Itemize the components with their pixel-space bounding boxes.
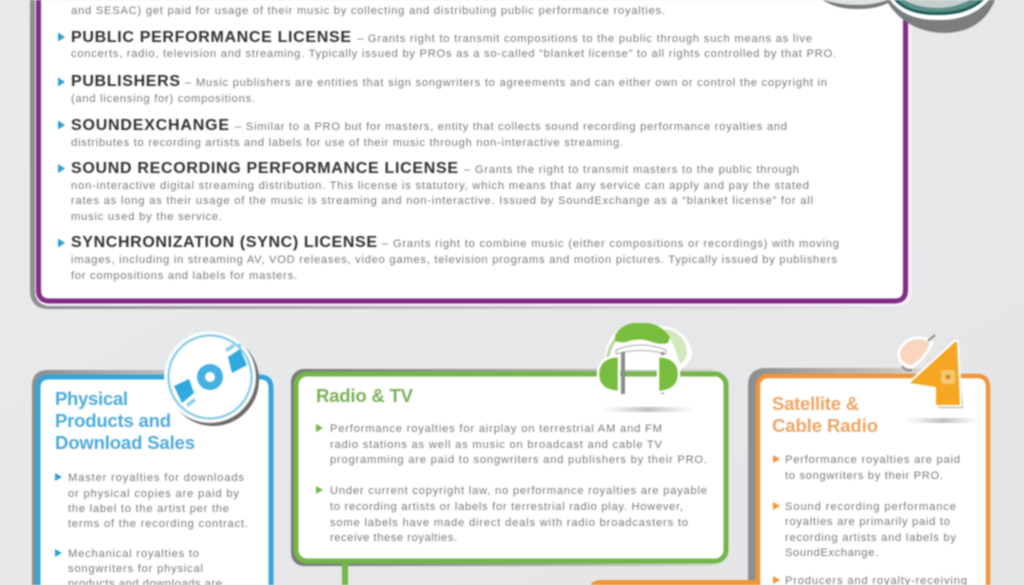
- bullet: master royalties: [55, 472, 248, 530]
- term: sound recording performance license: rates as long as their usage of the music is streaming and non-interactive. Issued by SoundExchange as a “blanket license” for all: [71, 195, 813, 207]
- icon: disc corner art: [823, 0, 995, 33]
- bullet: performance royalties: [773, 454, 960, 482]
- term: soundexchange: [58, 117, 787, 149]
- bullet: master royalties: terms of the recording contract.: [68, 518, 248, 530]
- term: public performance license: [58, 29, 836, 60]
- heading: physical products: Download Sales: [55, 432, 195, 453]
- term: soundexchange: – Similar to a PRO but for masters, entity that collects sound recording performance royalties and: [235, 121, 787, 133]
- heading: physical products: Products and: [55, 410, 171, 431]
- bullet: mechanical royalties: [55, 548, 222, 585]
- bullet: performance royalties for airplay: programming are paid to songwriters and publishers by their PRO.: [330, 454, 707, 466]
- bullet: performance royalties for airplay: radio stations as well as music on broadcast and cable TV: [330, 439, 663, 451]
- icon: satellite dish: [899, 335, 963, 408]
- heading: satellite and cable radio: Cable Radio: [772, 415, 878, 436]
- bullet: sound recording performance royalties: recording artists and labels by: [785, 532, 956, 544]
- term: sound recording performance license: music used by the service.: [71, 211, 222, 223]
- term: synchronization license: – Grants right to combine music (either compositions or recordings) with moving: [382, 238, 839, 250]
- term: publishers: (and licensing for) compositions.: [71, 93, 255, 105]
- term: sound recording performance license: non-interactive digital streaming distribution. This license is statutory, which means that any service can apply and pay the stated: [71, 180, 809, 192]
- bullet: performance royalties: Performance royalties are paid: [785, 454, 960, 466]
- term: publishers: PUBLISHERS: [71, 73, 180, 90]
- heading: radio and tv: Radio & TV: [316, 385, 414, 406]
- bullet: no performance royalties: [316, 485, 707, 544]
- panel: satellite and cable radio: [590, 335, 988, 585]
- term: synchronization license: images, including in streaming AV, VOD releases, video games, television programs and motion pictures. Typically issued by publishers: [71, 254, 837, 266]
- bullet: performance royalties for airplay: Performance royalties for airplay on terrestrial AM and FM: [330, 423, 662, 435]
- term: publishers: – Music publishers are entities that sign songwriters to agreements and can either own or control the copyright in: [185, 77, 827, 89]
- bullet: no performance royalties: Under current copyright law, no performance royalties are payable: [330, 485, 707, 497]
- bullet: performance royalties: to songwriters by their PRO.: [785, 470, 943, 482]
- bullet: no performance royalties: some labels have made direct deals with radio broadcasters to: [330, 517, 688, 529]
- bullet: mechanical royalties: songwriters for physical: [68, 563, 203, 575]
- bullet: master royalties: the label to the artist per the: [68, 503, 229, 515]
- term: synchronization license: SYNCHRONIZATION (SYNC) LICENSE: [71, 234, 377, 251]
- bullet: mechanical royalties: Mechanical royalties to: [68, 548, 199, 560]
- term: sound recording performance license: [58, 160, 813, 223]
- term: and SESAC continuation: and SESAC) get paid for usage of their music by collecting and distributing public performance royalties.: [71, 5, 665, 17]
- panel: glossary definitions: [30, 0, 995, 309]
- bullet: no performance royalties: to recording artists or labels for terrestrial radio play. However,: [330, 501, 683, 513]
- term: soundexchange: SOUNDEXCHANGE: [71, 117, 229, 134]
- panel: radio and tv: [291, 323, 726, 585]
- heading: satellite and cable radio: [772, 393, 878, 436]
- bullet: master royalties: Master royalties for downloads: [68, 472, 244, 484]
- term: soundexchange: distributes to recording artists and labels for use of their music through non-interactive streaming.: [71, 137, 623, 149]
- term: public performance license: – Grants right to transmit compositions to the public through such means as live: [357, 33, 812, 45]
- term: synchronization license: for compositions and labels for masters.: [71, 270, 297, 282]
- term: publishers: [58, 73, 827, 105]
- term: sound recording performance license: SOUND RECORDING PERFORMANCE LICENSE: [71, 160, 458, 177]
- icon: headphones: [596, 323, 692, 394]
- panel: physical products and download sales: [32, 331, 271, 585]
- bullet: master royalties: or physical copies are paid by: [68, 488, 239, 500]
- connector line: [342, 563, 348, 585]
- bullet: sound recording performance royalties: royalties are primarily paid to: [785, 516, 950, 528]
- bullet: no performance royalties: receive these royalties.: [330, 532, 457, 544]
- bullet: sound recording performance royalties: [773, 501, 956, 559]
- heading: physical products: [55, 388, 195, 453]
- term: synchronization license: [58, 234, 839, 282]
- term: public performance license: PUBLIC PERFORMANCE LICENSE: [71, 29, 351, 46]
- term: public performance license: concerts, radio, television and streaming. Typically issued by PROs as a so-called “blanket license” to all rights controlled by that PRO.: [71, 48, 836, 60]
- bullet: sound recording performance royalties: SoundExchange.: [785, 547, 878, 559]
- connector line: [590, 580, 756, 585]
- heading: satellite and cable radio: Satellite &: [772, 393, 859, 414]
- term: sound recording performance license: – Grants the right to transmit masters to the public through: [464, 164, 799, 176]
- bullet: performance royalties for airplay: [316, 423, 707, 466]
- heading: physical products: Physical: [55, 388, 128, 409]
- bullet: sound recording performance royalties: Sound recording performance: [785, 501, 956, 513]
- icon: compact disc: [164, 331, 259, 426]
